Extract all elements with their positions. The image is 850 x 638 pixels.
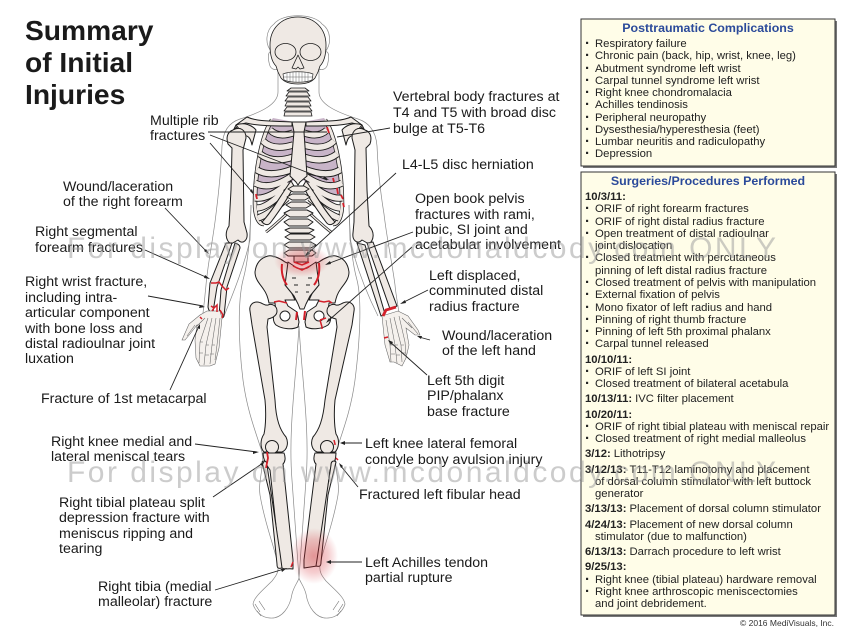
procedures list: generator xyxy=(595,488,644,500)
procedures list: 10/20/11: xyxy=(585,409,632,421)
label: right wrist: including intra- xyxy=(25,290,118,306)
label: left hand wound: Wound/laceration xyxy=(442,328,552,344)
label: right forearm wound: Wound/laceration xyxy=(63,179,173,195)
label: left hand wound: of the left hand xyxy=(442,343,536,359)
fracture glow: pelvis xyxy=(274,245,330,277)
label: right wrist: Right wrist fracture, xyxy=(25,274,147,290)
watermark: upper: For display on www.mcdonaldcody.com ONLY xyxy=(67,232,776,265)
label: right wrist: distal radioulnar joint xyxy=(25,336,155,352)
procedures list: Right knee (tibial plateau) hardware removal xyxy=(595,574,817,586)
complications list: Dysesthesia/hyperesthesia (feet) xyxy=(595,124,760,136)
procedures list: 3/12/13: xyxy=(585,464,626,476)
procedures list: 10/10/11: xyxy=(585,354,632,366)
complications list: · xyxy=(585,109,590,126)
procedures list: Placement of new dorsal column xyxy=(629,519,793,531)
complications list: · xyxy=(585,145,590,162)
procedures list: · xyxy=(585,375,590,392)
complications list: Right knee chondromalacia xyxy=(595,87,733,99)
procedures list: · xyxy=(585,299,590,316)
skeleton: pelvis xyxy=(255,256,349,329)
label: right tibia: malleolar) fracture xyxy=(98,594,212,610)
skeleton: lumbar spine xyxy=(284,186,316,262)
procedures list: · xyxy=(585,249,590,266)
label: left radius: radius fracture xyxy=(429,299,520,315)
label: vertebral body fractures: bulge at T5-T6 xyxy=(393,121,485,137)
label: fibular head: Fractured left fibular head xyxy=(359,487,521,503)
label: segmental forearm: forearm fractures xyxy=(35,240,143,256)
complications list: Achilles tendinosis xyxy=(595,99,688,111)
label: multiple rib fractures: Multiple rib xyxy=(150,113,219,129)
title: Summary xyxy=(25,14,154,46)
label: right wrist: articular component xyxy=(25,305,150,321)
procedures list: Lithotripsy xyxy=(614,448,666,460)
label: multiple rib fractures: fractures xyxy=(150,128,205,144)
label: tibial plateau: meniscus ripping and xyxy=(59,526,193,542)
procedures list: · xyxy=(585,311,590,328)
procedures list: Pinning of right thumb fracture xyxy=(595,314,746,326)
label: left radius: comminuted distal xyxy=(429,283,543,299)
label: left 5th digit: PIP/phalanx xyxy=(427,388,504,404)
fracture marks xyxy=(200,127,396,567)
label: open book pelvis: pubic, SI joint and xyxy=(415,222,528,238)
procedures list: · xyxy=(585,418,590,435)
skeleton: left arm xyxy=(352,128,420,366)
complications list: · xyxy=(585,47,590,64)
label: tibial plateau: tearing xyxy=(59,541,102,557)
label: Achilles: partial rupture xyxy=(365,570,453,586)
label: vertebral body fractures: Vertebral body fractures at xyxy=(393,89,559,105)
complications list: · xyxy=(585,133,590,150)
complications list: · xyxy=(585,35,590,52)
complications list: · xyxy=(585,121,590,138)
label: right forearm wound: of the right forearm xyxy=(63,194,183,210)
complications list: Chronic pain (back, hip, wrist, knee, leg) xyxy=(595,50,796,62)
label: left 5th digit: Left 5th digit xyxy=(427,373,504,389)
skeleton: right arm xyxy=(182,128,247,366)
panel: posttraumatic complications xyxy=(581,19,837,168)
procedures list: 6/13/13: xyxy=(585,546,626,558)
procedures list: · xyxy=(585,571,590,588)
procedures list: 10/13/11: xyxy=(585,393,632,405)
right hand bones xyxy=(182,311,222,366)
procedures list: · xyxy=(585,363,590,380)
procedures list: Darrach procedure to left wrist xyxy=(629,546,782,558)
procedures list: External fixation of pelvis xyxy=(595,289,720,301)
leader lines and arrows xyxy=(145,128,430,590)
procedures list: and joint debridement. xyxy=(595,598,707,610)
label: right wrist: luxation xyxy=(25,351,74,367)
title xyxy=(25,14,154,110)
procedures list: · xyxy=(585,274,590,291)
procedures list: 4/24/13: xyxy=(585,519,626,531)
label: disc herniation: L4-L5 disc herniation xyxy=(402,157,534,173)
skeleton: shoulders and clavicles xyxy=(233,117,365,145)
complications list: Depression xyxy=(595,148,652,160)
procedures list: · xyxy=(585,323,590,340)
title: Injuries xyxy=(25,78,125,110)
complications list: Lumbar neuritis and radiculopathy xyxy=(595,136,766,148)
label: tibial plateau: depression fracture with xyxy=(59,510,210,526)
label: segmental forearm: Right segmental xyxy=(35,224,138,240)
procedures list: stimulator (due to malfunction) xyxy=(595,531,747,543)
procedures list: · xyxy=(585,335,590,352)
label: open book pelvis: fractures with rami, xyxy=(415,207,535,223)
procedures list: ORIF of left SI joint xyxy=(595,366,691,378)
label: tibial plateau: Right tibial plateau split xyxy=(59,495,205,511)
procedures list: · xyxy=(585,430,590,447)
procedures list: · xyxy=(585,583,590,600)
fracture glow: Achilles xyxy=(290,528,338,584)
procedures list: Mono fixator of left radius and hand xyxy=(595,302,772,314)
label: right wrist: with bone loss and xyxy=(24,321,143,337)
skeleton: cervical spine xyxy=(284,88,312,116)
complications list: · xyxy=(585,84,590,101)
skeleton: left leg xyxy=(304,302,354,568)
label: left knee: condyle bony avulsion injury xyxy=(365,452,543,468)
procedures list: 3/12: xyxy=(585,448,611,460)
label: right knee: Right knee medial and xyxy=(51,434,192,450)
procedures list: · xyxy=(585,225,590,242)
copyright: © 2016 MediVisuals, Inc. xyxy=(740,618,834,628)
skeleton: rib cage xyxy=(255,120,342,232)
procedures list: ORIF of right tibial plateau with meniscal repair xyxy=(595,421,829,433)
skeleton: lungs xyxy=(256,118,341,202)
procedures list: · xyxy=(585,286,590,303)
procedures list: Right knee arthroscopic meniscectomies xyxy=(595,586,798,598)
heading: Surgeries/Procedures Performed xyxy=(611,174,805,188)
label: left knee: Left knee lateral femoral xyxy=(365,436,517,452)
complications list: Respiratory failure xyxy=(595,38,687,50)
label: Achilles: Left Achilles tendon xyxy=(365,555,488,571)
procedures list: IVC filter placement xyxy=(635,393,735,405)
complications list: Carpal tunnel syndrome left wrist xyxy=(595,75,760,87)
procedures list: pinning of left distal radius fracture xyxy=(595,265,767,277)
procedures list: Pinning of left 5th proximal phalanx xyxy=(595,326,771,338)
title: of Initial xyxy=(25,46,133,78)
label: right knee: lateral meniscal tears xyxy=(51,449,185,465)
procedures list: Closed treatment of bilateral acetabula xyxy=(595,378,789,390)
procedures list: of dorsal column stimulator with left buttock xyxy=(595,476,811,488)
procedures list: Closed treatment with percutaneous xyxy=(595,252,776,264)
label: vertebral body fractures: T4 and T5 with broad disc xyxy=(393,105,556,121)
complications list: Peripheral neuropathy xyxy=(595,112,707,124)
complications list: · xyxy=(585,72,590,89)
watermark: lower: For display on www.mcdonaldcody.com ONLY xyxy=(67,456,776,489)
skeleton: skull xyxy=(270,17,326,84)
label: left 5th digit: base fracture xyxy=(427,404,510,420)
procedures list: joint dislocation xyxy=(594,240,672,252)
procedures list: Closed treatment of right medial malleolus xyxy=(595,433,806,445)
label: open book pelvis: acetabular involvement xyxy=(415,237,561,253)
procedures list: 3/13/13: xyxy=(585,503,626,515)
heading: Posttraumatic Complications xyxy=(622,21,794,35)
panel: surgeries and procedures xyxy=(581,172,837,617)
label: metacarpal: Fracture of 1st metacarpal xyxy=(41,391,207,407)
complications list: Abutment syndrome left wrist xyxy=(595,63,742,75)
procedures list: Open treatment of distal radioulnar xyxy=(595,228,769,240)
procedures list: · xyxy=(585,200,590,217)
procedures list: · xyxy=(585,213,590,230)
procedures list: Placement of dorsal column stimulator xyxy=(629,503,821,515)
skeleton: right leg xyxy=(250,302,293,569)
body outline xyxy=(203,16,399,618)
procedures list: Closed treatment of pelvis with manipulation xyxy=(595,277,816,289)
procedures list: T11-T12 laminotomy and placement xyxy=(629,464,810,476)
procedures list: Carpal tunnel released xyxy=(595,338,709,350)
procedures list: 9/25/13: xyxy=(585,561,626,573)
label: open book pelvis: Open book pelvis xyxy=(415,191,525,207)
procedures list: ORIF of right forearm fractures xyxy=(595,203,749,215)
left hand bones xyxy=(382,311,420,366)
complications list: · xyxy=(585,60,590,77)
complications list: · xyxy=(585,96,590,113)
label: right tibia: Right tibia (medial xyxy=(98,579,212,595)
procedures list: 10/3/11: xyxy=(585,191,626,203)
procedures list: ORIF of right distal radius fracture xyxy=(595,216,765,228)
label: left radius: Left displaced, xyxy=(429,268,520,284)
